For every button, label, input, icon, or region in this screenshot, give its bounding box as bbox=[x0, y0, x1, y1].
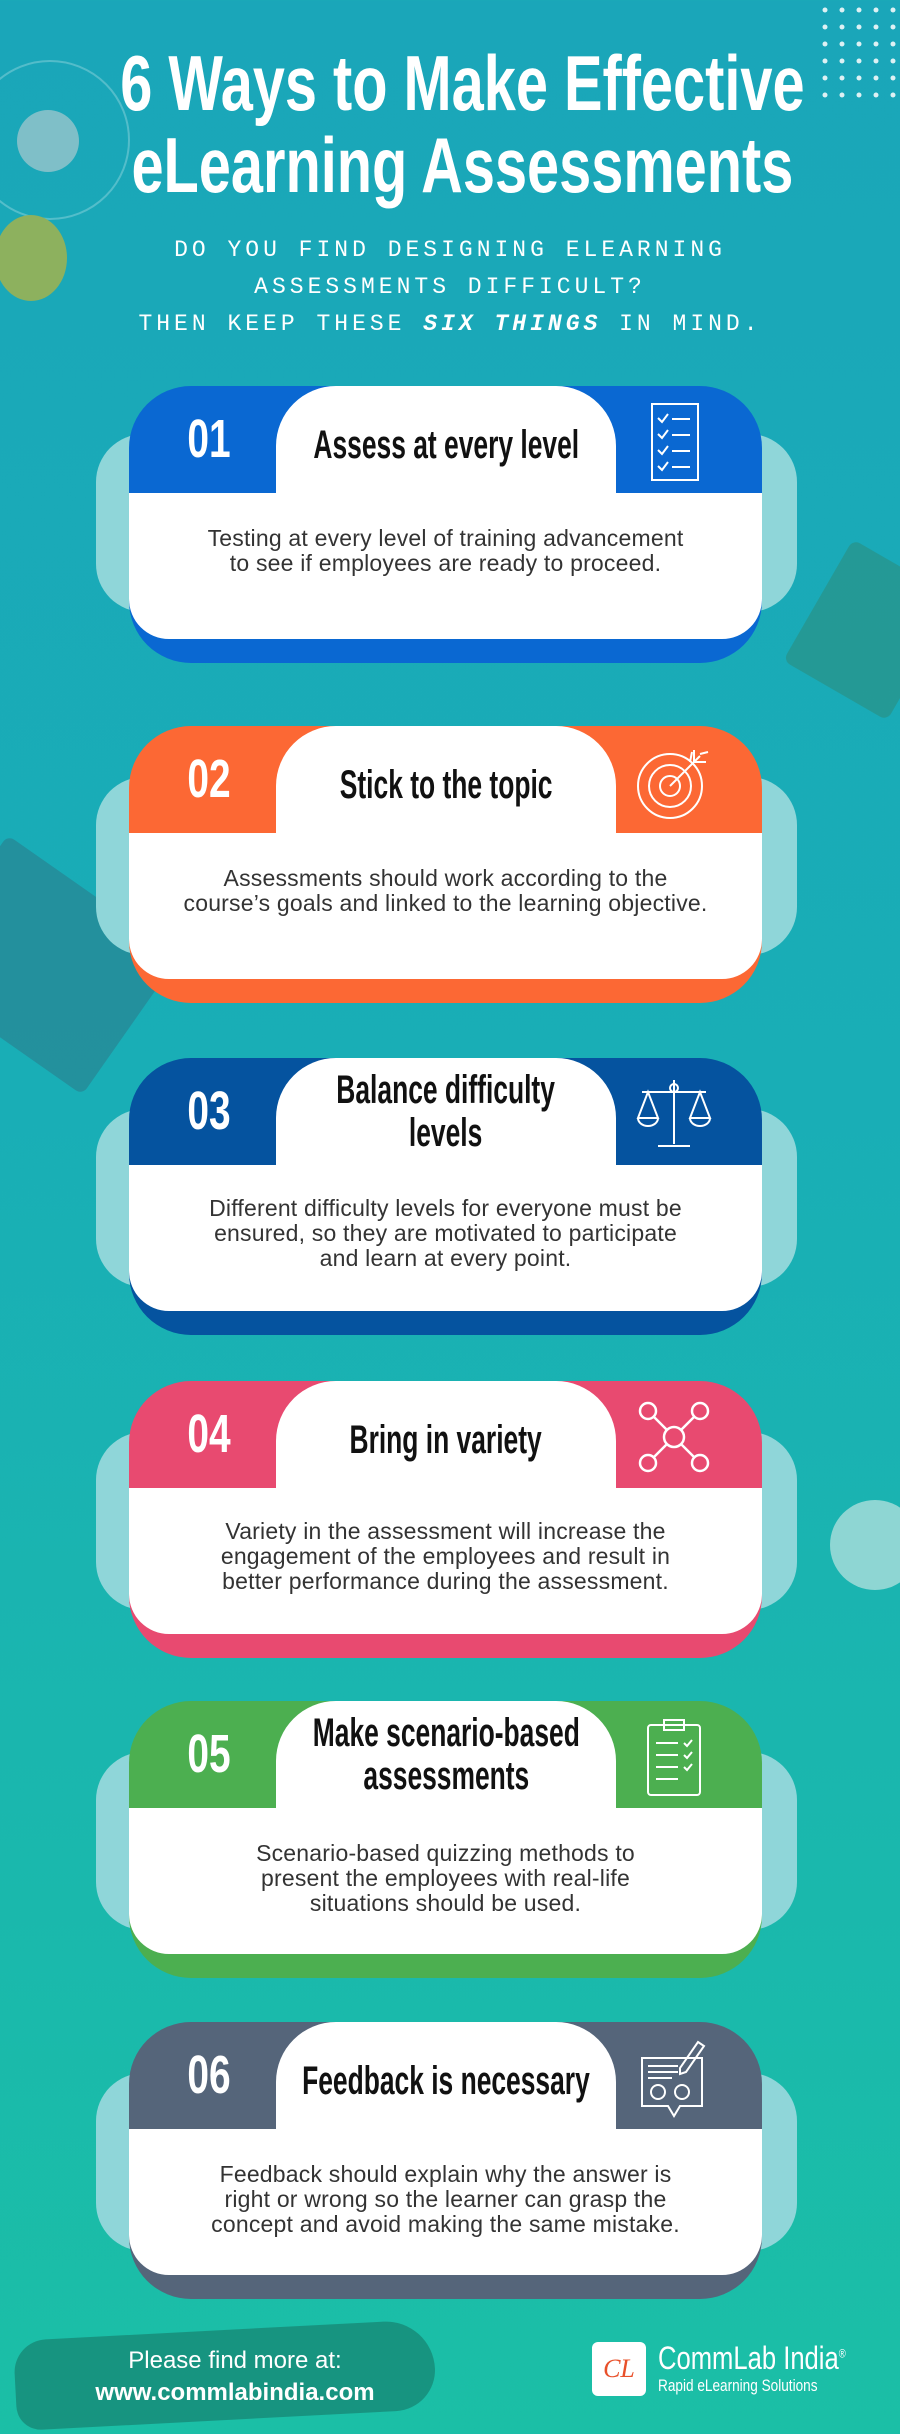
text 04 bbox=[221, 1518, 670, 1594]
icon: feedback bbox=[641, 2040, 706, 2118]
text 04: engagement of the employees and result in bbox=[221, 1543, 670, 1569]
text 05 bbox=[256, 1840, 635, 1916]
heading 02: Stick to the topic bbox=[340, 763, 552, 807]
logo: CommLab India® bbox=[658, 2340, 846, 2376]
decoration: dot grid bbox=[822, 8, 896, 98]
text 05: present the employees with real-life bbox=[261, 1865, 630, 1891]
number 05: 05 bbox=[187, 1724, 231, 1784]
subtitle: THEN KEEP THESE SIX THINGS IN MIND. bbox=[138, 311, 762, 337]
panel: 06 bbox=[96, 2022, 797, 2299]
text 03: ensured, so they are motivated to participate bbox=[214, 1220, 677, 1246]
text 01: Testing at every level of training advancement bbox=[208, 525, 683, 551]
panel: 05 bbox=[96, 1701, 797, 1978]
text 03: Different difficulty levels for everyone must be bbox=[209, 1195, 682, 1221]
heading 05: assessments bbox=[363, 1754, 529, 1798]
text 02: Assessments should work according to the bbox=[224, 865, 667, 891]
subtitle bbox=[138, 237, 762, 337]
number 01: 01 bbox=[187, 409, 231, 469]
logo: CL bbox=[603, 2354, 635, 2383]
footer: brush background bbox=[13, 2319, 437, 2431]
heading 05: Make scenario-based bbox=[312, 1710, 580, 1754]
text 03 bbox=[209, 1195, 682, 1271]
footer: website text bbox=[95, 2347, 375, 2406]
heading 05 bbox=[312, 1710, 580, 1798]
panel: 02 bbox=[96, 726, 797, 1003]
footer: website text: www.commlabindia.com bbox=[95, 2379, 375, 2406]
text 01 bbox=[208, 525, 684, 576]
text 04: better performance during the assessment. bbox=[222, 1568, 669, 1594]
panel: 04 bbox=[96, 1381, 797, 1658]
icon: scales bbox=[636, 1080, 712, 1147]
text 06: concept and avoid making the same mistake. bbox=[211, 2211, 680, 2237]
subtitle: DO YOU FIND DESIGNING ELEARNING bbox=[174, 237, 726, 263]
text 06: right or wrong so the learner can grasp the bbox=[224, 2186, 666, 2212]
text 06 bbox=[211, 2161, 680, 2237]
heading 01: Assess at every level bbox=[313, 423, 579, 467]
text 02: course’s goals and linked to the learning objective. bbox=[184, 890, 707, 916]
number 06: 06 bbox=[187, 2045, 231, 2105]
panel: 03 bbox=[96, 1058, 797, 1335]
icon: network bbox=[638, 1402, 710, 1472]
title: 6 Ways to Make Effective bbox=[120, 39, 805, 127]
text 05: situations should be used. bbox=[310, 1890, 581, 1916]
subtitle: ASSESSMENTS DIFFICULT? bbox=[254, 274, 646, 300]
text 02 bbox=[184, 865, 707, 916]
heading 04: Bring in variety bbox=[350, 1418, 542, 1462]
text 06: Feedback should explain why the answer is bbox=[220, 2161, 671, 2187]
text 04: Variety in the assessment will increase the bbox=[225, 1518, 666, 1544]
text 05: Scenario-based quizzing methods to bbox=[256, 1840, 635, 1866]
icon: clipboard bbox=[647, 1719, 701, 1796]
logo: Rapid eLearning Solutions bbox=[658, 2376, 818, 2395]
text 01: to see if employees are ready to proceed. bbox=[230, 550, 661, 576]
number 02: 02 bbox=[187, 749, 231, 809]
number 04: 04 bbox=[187, 1404, 231, 1464]
heading 03: Balance difficulty bbox=[337, 1068, 555, 1112]
title bbox=[120, 39, 805, 209]
number 03: 03 bbox=[187, 1081, 231, 1141]
text 03: and learn at every point. bbox=[320, 1245, 571, 1271]
footer: website text: Please find more at: bbox=[128, 2347, 342, 2374]
icon: target bbox=[637, 750, 708, 819]
heading 03 bbox=[337, 1068, 555, 1154]
logo bbox=[592, 2340, 846, 2396]
heading 03: levels bbox=[409, 1110, 483, 1154]
icon: checklist bbox=[651, 403, 699, 481]
heading 06: Feedback is necessary bbox=[302, 2059, 590, 2103]
panel: 01 bbox=[96, 386, 797, 663]
title: eLearning Assessments bbox=[131, 121, 793, 209]
